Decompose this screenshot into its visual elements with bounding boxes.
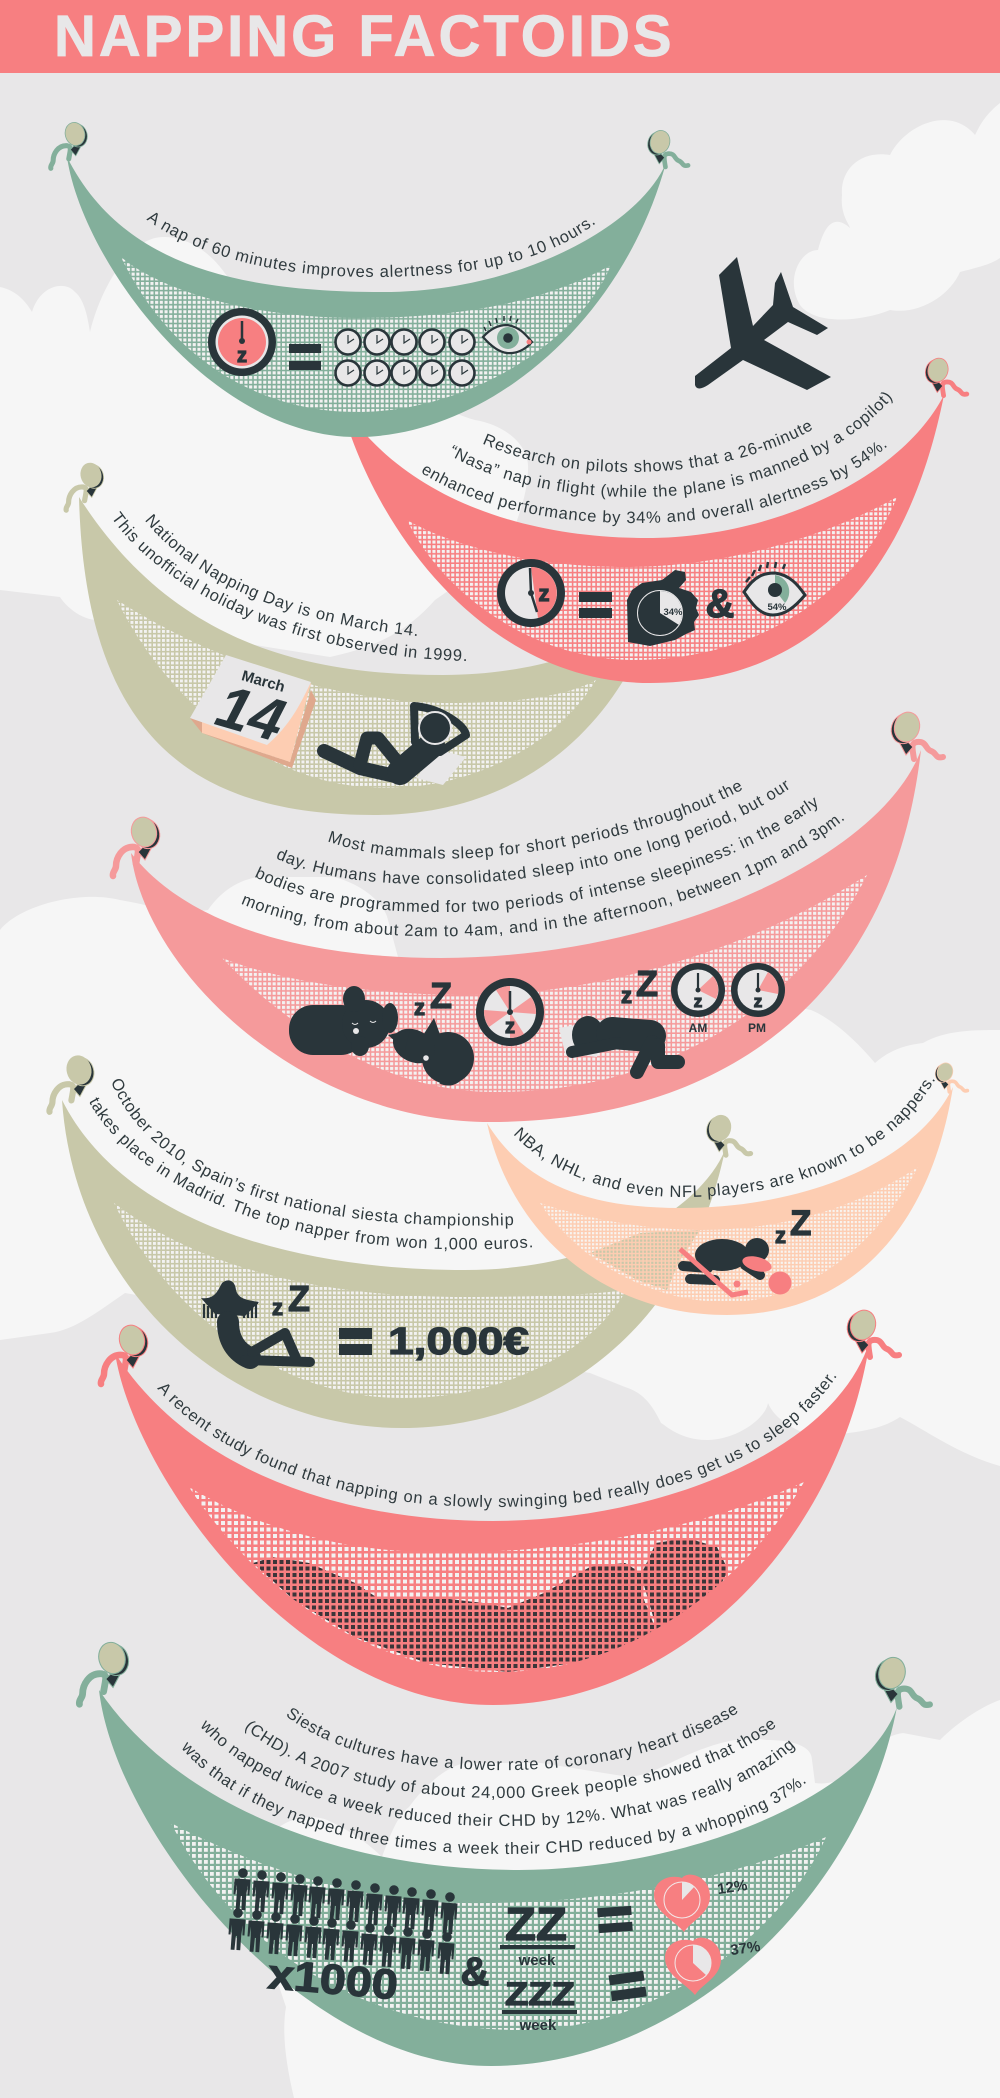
label: 12 percent: 12% bbox=[716, 1877, 748, 1898]
icon: PM clock: PM bbox=[748, 1021, 766, 1035]
text: mammals: Most mammals sleep for short periods throughout the day. Humans have consolidated sleep into one long period, but our bodies are programmed for two periods of intense sleepiness: in the early morning, from about 2am to 4am, and in the afternoon, between 1pm and 3pm. bbox=[242, 780, 844, 936]
fraction: two naps per week bbox=[500, 1898, 575, 1969]
icon: thumbs up 34 percent bbox=[627, 570, 699, 646]
icon: AM clock: z bbox=[694, 992, 702, 1011]
text: swinging bed: A recent study found that napping on a slowly swinging bed really does get us to sleep faster. bbox=[157, 1374, 836, 1510]
icon: zz: z bbox=[775, 1223, 786, 1248]
text: siesta championship: October 2010, Spain’s first national siesta championshiptakes place in Madrid. The top napper from won 1,000 euros. bbox=[90, 1079, 532, 1252]
panel: coronary heart disease hammock bbox=[76, 1642, 933, 2066]
icon: eye 54 percent: 54% bbox=[767, 602, 787, 613]
ampersand: & bbox=[706, 582, 734, 626]
icon: zz person: Z bbox=[636, 963, 658, 1004]
text: national napping day: National Napping Day is on March 14.This unofficial holiday was first observed in 1999. bbox=[114, 511, 466, 661]
fraction: two naps per week: week bbox=[518, 1952, 556, 1969]
icon: airplane bbox=[695, 257, 831, 390]
fraction: three naps per week: week bbox=[519, 2017, 557, 2034]
header bar bbox=[0, 0, 1000, 73]
icon: 60 minute clock bbox=[208, 308, 276, 376]
fraction: two naps per week: ZZ bbox=[505, 1898, 567, 1950]
icon: 26 minute clock bbox=[497, 559, 565, 627]
text: nasa nap research: Research on pilots shows that a 26-minute “Nasa” nap in flight (while the plane is manned by a copilot) enhanced performance by 34% and overall alertness by 54%. bbox=[422, 392, 893, 526]
icon: eye 54 percent bbox=[744, 562, 805, 615]
icon: ten small clocks bbox=[336, 330, 474, 386]
icon: two nap windows clock bbox=[476, 978, 544, 1046]
text: 60 minute nap: A nap of 60 minutes improves alertness for up to 10 hours. bbox=[146, 212, 595, 278]
panel: swinging bed hammock bbox=[76, 1310, 933, 1746]
icon: zz: Z bbox=[288, 1278, 310, 1319]
text: athletes: NBA, NHL, and even NFL players are known to be nappers. bbox=[514, 1079, 935, 1200]
icon: zz dog: z bbox=[414, 995, 425, 1020]
prize amount: 1,000€ bbox=[388, 1321, 529, 1363]
icon: equals bbox=[339, 1328, 372, 1355]
icon: zz: z bbox=[272, 1295, 283, 1320]
icon: calendar march 14: March bbox=[240, 667, 287, 696]
icon: equals bbox=[289, 344, 321, 370]
icon: PM clock bbox=[731, 963, 785, 1035]
icon: heart 37 percent bbox=[665, 1938, 721, 1995]
text: siesta cultures study: Siesta cultures have a lower rate of coronary heart disease(CHD). A 2007 study of about 24,000 Greek people showed that thosewho napped twice a week reduced their CHD by 12%. What was really amazingwas that if they napped three times a week their CHD reduced by a whopping 37%. bbox=[182, 1706, 806, 1854]
icon: thumbs up 34 percent: 34% bbox=[663, 607, 683, 618]
icon: sleeping dog bbox=[289, 986, 398, 1056]
label: x1000: x1000 bbox=[266, 1950, 400, 2008]
fraction: three naps per week: ZZZ bbox=[505, 1976, 575, 2012]
panel: mammals sleep hammock bbox=[110, 712, 946, 1122]
icon: sleeping person bbox=[559, 1016, 678, 1072]
icon: sleeper silhouette in mesh bbox=[253, 1538, 728, 1672]
icon: sleeping man in sombrero bbox=[201, 1280, 310, 1362]
icon: sleeping cat bbox=[387, 1018, 474, 1084]
icon: two nap windows clock: z bbox=[505, 1016, 515, 1038]
icon: 26 minute clock: z bbox=[538, 581, 550, 606]
panel: 60 minute nap hammock bbox=[48, 122, 690, 437]
icon: zz dog bbox=[414, 975, 452, 1020]
title: NAPPING FACTOIDS bbox=[54, 4, 675, 69]
label: 37 percent: 37% bbox=[729, 1938, 761, 1959]
icon: sleeping hockey player bbox=[680, 1238, 792, 1295]
icon: zz person: z bbox=[621, 983, 632, 1008]
icon: zz person bbox=[621, 963, 658, 1008]
icon: zz dog: Z bbox=[430, 975, 452, 1016]
panel: siesta championship hammock bbox=[46, 1013, 791, 1468]
icon: equals two bbox=[608, 1971, 647, 2001]
icon: alert eye bbox=[483, 316, 532, 353]
icon: PM clock: z bbox=[754, 992, 762, 1011]
icon: people rows bbox=[227, 1868, 458, 1974]
icon: heart 12 percent bbox=[654, 1875, 710, 1932]
icon: zz bbox=[775, 1204, 811, 1248]
icon: AM clock bbox=[671, 963, 725, 1035]
icon: zz: Z bbox=[790, 1204, 811, 1243]
icon: equals bbox=[579, 592, 612, 618]
icon: calendar march 14: 14 bbox=[209, 672, 292, 755]
panel: pro athletes hammock bbox=[487, 1062, 970, 1315]
icon: AM clock: AM bbox=[689, 1021, 707, 1035]
panel: nasa pilots hammock bbox=[351, 358, 970, 683]
icon: man lying with hands behind head bbox=[324, 706, 466, 785]
icon: calendar march 14 bbox=[190, 655, 316, 768]
icon: equals one bbox=[597, 1906, 633, 1933]
icon: zz bbox=[272, 1278, 310, 1320]
panel: national napping day hammock bbox=[64, 462, 623, 815]
ampersand: & bbox=[461, 1950, 489, 1994]
icon: 60 minute clock: z bbox=[237, 345, 247, 367]
fraction: three naps per week bbox=[502, 1976, 577, 2034]
